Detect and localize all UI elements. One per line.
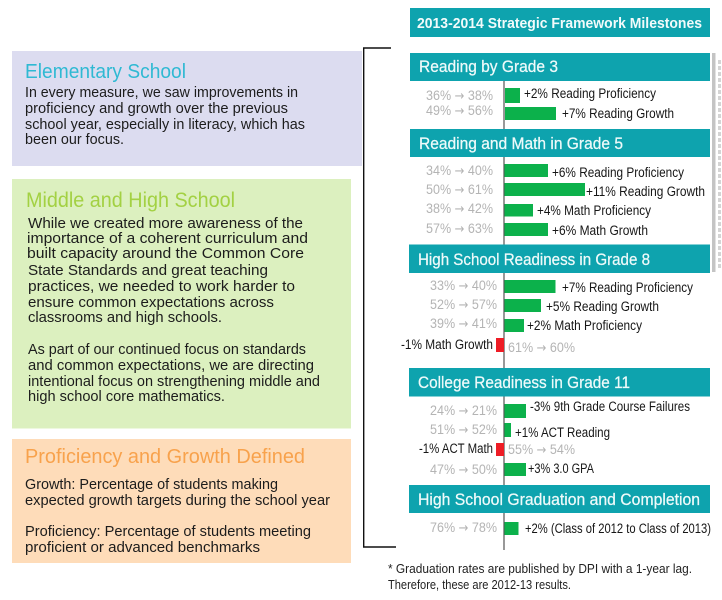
bar row: gpa: +3% 3.0 GPA [528,461,594,476]
heading: proficiency and growth defined: Proficiency and Growth Defined [25,446,305,468]
bar row: graduation [430,519,711,536]
title bar [410,8,710,37]
section header [409,485,710,513]
text: elementary school summary: proficiency and growth over the previous [25,100,288,117]
section: high school graduation and completion [409,485,711,536]
heading: middle and high school: Middle and High School [26,188,235,212]
bar row: reading proficiency: +6% Reading Proficiency [552,165,684,180]
heading: elementary school: Elementary School [25,61,186,83]
text: growth definition: expected growth targets during the school year [25,492,330,509]
bar row: reading proficiency: 34% → 40% [426,162,493,179]
bar row: reading proficiency [430,277,693,295]
bar row: math proficiency: +4% Math Proficiency [537,203,651,218]
bar row: reading proficiency: 33% → 40% [430,277,497,294]
section header: High School Graduation and Completion [418,491,700,509]
bar row: reading growth [430,296,659,314]
bar row: reading proficiency: +7% Reading Proficiency [562,280,693,295]
text: middle and high school first paragraph: built capacity around the Common Core [27,245,304,262]
bar row: act reading [430,421,610,440]
section header: Reading by Grade 3 [419,58,558,76]
bar row: reading growth: 52% → 57% [430,296,497,313]
bar row: reading proficiency: 36% → 38% [426,87,493,104]
bar row: course failures [430,399,690,419]
text: proficiency definition: Proficiency: Percentage of students meeting [25,523,311,540]
section header [409,368,710,396]
text: elementary school summary [25,84,305,148]
section header [409,244,710,273]
bar row: gpa: 47% → 50% [430,461,497,478]
bar row: math proficiency [430,315,642,333]
footnote: * Graduation rates are published by DPI with a 1-year lag. [388,561,692,576]
bar row: math growth decline: 61% → 60% [508,339,575,356]
bar row: act math decline: 55% → 54% [508,441,575,458]
bar row: math proficiency [426,200,651,218]
bar row: act reading: 51% → 52% [430,421,497,438]
text: middle and high school first paragraph: While we created more awareness of the [28,215,303,232]
bar row: reading growth [426,181,705,199]
bar row: act math decline: -1% ACT Math [419,441,493,456]
axis line [503,81,505,550]
section: college readiness in grade 11 [409,368,710,478]
text: growth definition: Growth: Percentage of students making [25,476,278,493]
text: middle and high school second paragraph: high school core mathematics. [28,388,225,405]
text: middle and high school first paragraph: State Standards and great teaching [28,262,268,279]
bar row: math growth: +6% Math Growth [552,223,648,238]
bar row: reading growth: +7% Reading Growth [562,106,674,121]
bar row: math growth decline [401,337,575,356]
text: proficiency definition: proficient or advanced benchmarks [25,539,260,556]
bar row: reading proficiency [426,86,656,104]
section: reading and math in grade 5 [410,129,710,238]
bar row: math growth: 57% → 63% [426,220,493,237]
bar row: math proficiency: +2% Math Proficiency [527,318,642,333]
panel: middle and high school [12,179,351,428]
bar row: reading growth: +11% Reading Growth [586,184,705,199]
text: middle and high school first paragraph: importance of a coherent curriculum and [27,230,308,247]
text: middle and high school second paragraph: As part of our continued focus on standards [28,341,306,358]
bracket [364,48,396,547]
text: middle and high school first paragraph: classrooms and high schools. [28,309,222,326]
bar row: reading growth: 50% → 61% [426,181,493,198]
bar row: reading growth [426,102,674,121]
bar row: math growth [426,220,648,238]
text: proficiency definition [25,523,311,556]
bar row: course failures: 24% → 21% [430,402,497,419]
bar row: reading growth: 49% → 56% [426,102,493,119]
text: growth definition [25,476,330,509]
text: middle and high school first paragraph [27,215,308,326]
text: middle and high school first paragraph: practices, we needed to work harder to [28,278,295,295]
bar row: gpa [430,461,594,478]
bar row: math proficiency: 38% → 42% [426,200,493,217]
text: elementary school summary: been our focus. [25,131,124,148]
bar row: act reading: +1% ACT Reading [515,425,610,440]
bar row: reading proficiency: +2% Reading Proficiency [524,86,656,101]
section header: High School Readiness in Grade 8 [418,251,650,269]
section header: Reading and Math in Grade 5 [419,135,623,153]
text: middle and high school second paragraph [28,341,320,405]
panel: proficiency and growth defined [12,439,351,563]
section header [410,129,710,157]
bar row: reading proficiency [426,162,684,180]
section: reading by grade 3 [410,53,710,121]
footnote [388,561,692,592]
gray side rule [712,53,720,272]
panel: elementary school [12,51,362,166]
bar row: reading growth: +5% Reading Growth [546,299,659,314]
text: middle and high school second paragraph: intentional focus on strengthening middle and [28,373,320,390]
section: high school readiness in grade 8 [401,244,710,356]
text: middle and high school second paragraph: and common expectations, we are directing [28,357,314,374]
text: elementary school summary: In every measure, we saw improvements in [25,84,298,101]
section header [410,53,710,81]
bar row: math growth decline: -1% Math Growth [401,337,493,352]
footnote: Therefore, these are 2012-13 results. [388,577,571,592]
bar row: math proficiency: 39% → 41% [430,315,497,332]
section header: College Readiness in Grade 11 [418,374,630,392]
text: middle and high school first paragraph: ensure common expectations across [28,294,274,311]
text: elementary school summary: school year, especially in literacy, which has [25,116,305,133]
title bar: 2013-2014 Strategic Framework Milestones [417,16,702,32]
bar row: act math decline [419,441,575,458]
bar row: course failures: -3% 9th Grade Course Failures [530,399,690,414]
bar row: graduation: 76% → 78% [430,519,497,536]
